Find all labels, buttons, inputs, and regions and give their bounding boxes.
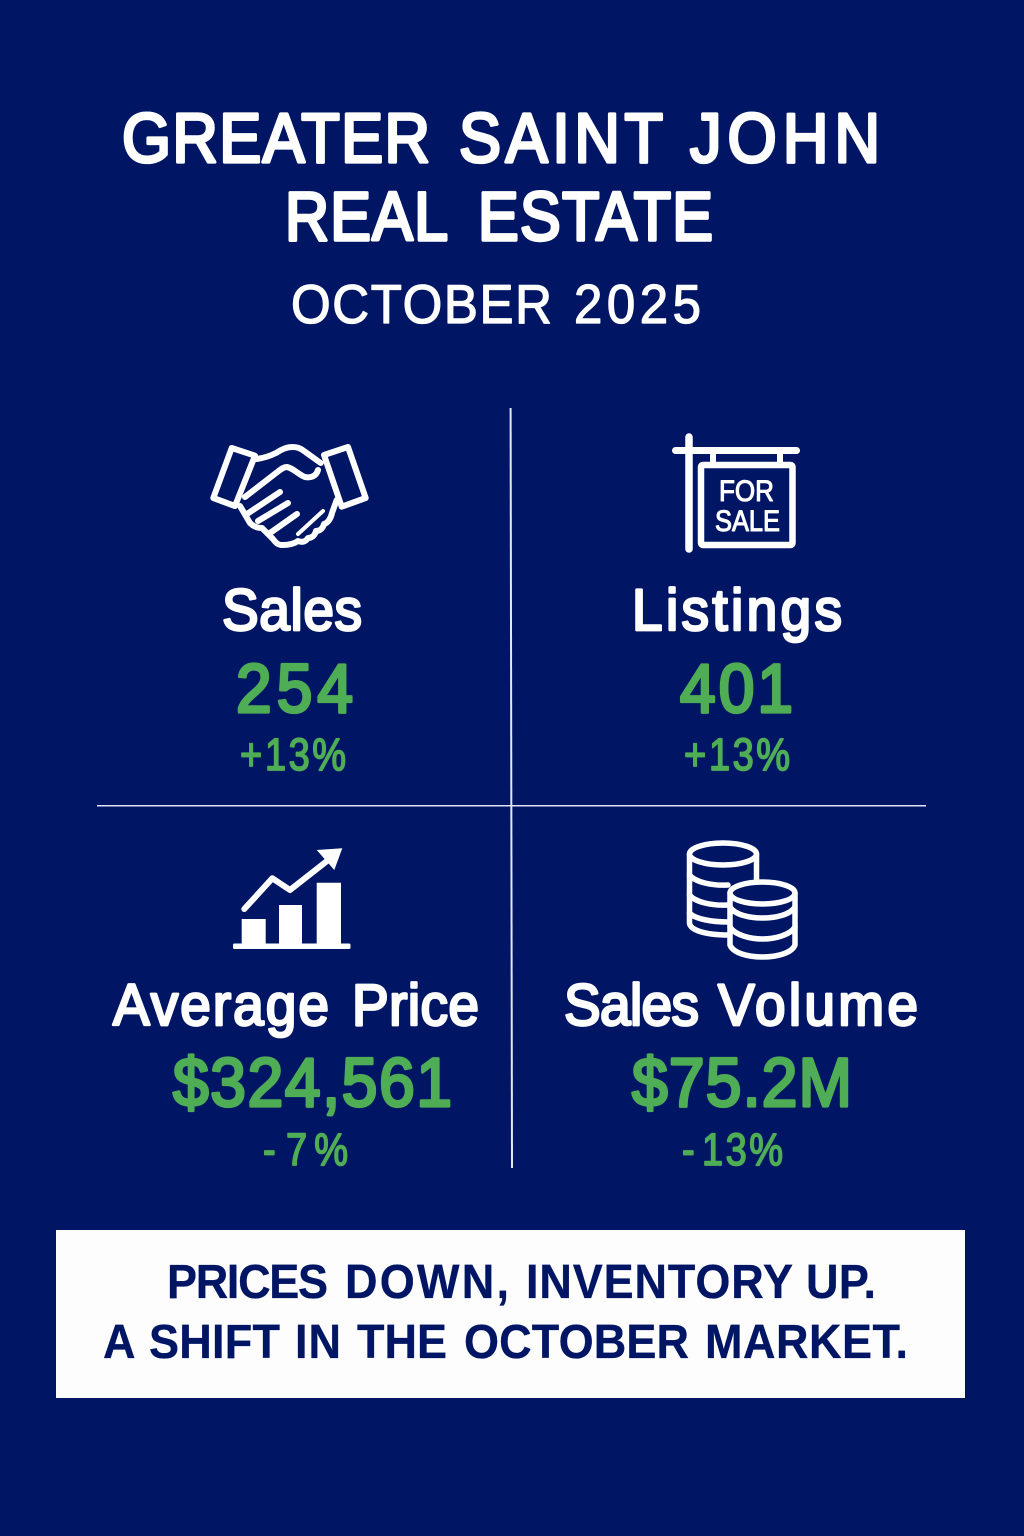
callout: OCTOBER bbox=[464, 1315, 689, 1368]
change: average price: 7% bbox=[286, 1124, 348, 1175]
panel: average price bbox=[113, 848, 479, 1175]
callout: PRICES bbox=[167, 1255, 328, 1308]
icon: rising bar chart bbox=[233, 848, 350, 949]
callout: A bbox=[103, 1315, 135, 1368]
heading: average price: Average bbox=[113, 972, 329, 1038]
title: ESTATE bbox=[478, 178, 713, 255]
value: sales: 254 bbox=[236, 651, 353, 727]
title: SAINT bbox=[459, 100, 663, 178]
callout: SHIFT bbox=[149, 1315, 280, 1368]
change: listings: + bbox=[684, 729, 706, 780]
callout bbox=[56, 1230, 965, 1398]
subtitle: date: OCTOBER bbox=[291, 274, 552, 335]
icon: coin stacks bbox=[690, 843, 795, 957]
icon: handshake bbox=[213, 447, 366, 545]
heading: sales: Sales bbox=[222, 577, 362, 643]
heading: sales volume: Sales bbox=[564, 972, 699, 1038]
callout: IN bbox=[295, 1315, 341, 1368]
panel: sales volume bbox=[564, 843, 918, 1175]
value: sales volume: $75.2M bbox=[632, 1045, 852, 1121]
change: sales volume: - bbox=[682, 1124, 695, 1175]
panel: sales bbox=[213, 447, 366, 780]
icon: for sale sign: SALE bbox=[715, 505, 780, 538]
value: average price: $324,561 bbox=[173, 1045, 452, 1121]
panel: listings bbox=[632, 437, 842, 780]
callout: UP. bbox=[806, 1255, 876, 1308]
heading: average price: Price bbox=[352, 972, 479, 1038]
title: GREATER bbox=[122, 100, 430, 178]
callout: DOWN, bbox=[345, 1255, 509, 1308]
change: sales: + bbox=[240, 729, 262, 780]
change: average price: - bbox=[263, 1124, 276, 1175]
callout: INVENTORY bbox=[526, 1255, 793, 1308]
icon: for sale sign: FOR bbox=[719, 475, 774, 508]
title bbox=[122, 100, 880, 255]
title: REAL bbox=[285, 178, 448, 255]
callout: THE bbox=[357, 1315, 447, 1368]
change: listings: 13% bbox=[709, 729, 790, 780]
icon: for sale sign bbox=[676, 437, 796, 549]
subtitle: date: 2025 bbox=[574, 274, 701, 335]
value: listings: 401 bbox=[680, 651, 793, 727]
callout: MARKET. bbox=[705, 1315, 908, 1368]
title: JOHN bbox=[690, 100, 880, 178]
heading: listings: Listings bbox=[632, 577, 842, 643]
heading: sales volume: Volume bbox=[718, 972, 918, 1038]
change: sales volume: 13% bbox=[702, 1124, 783, 1175]
change: sales: 13% bbox=[265, 729, 346, 780]
